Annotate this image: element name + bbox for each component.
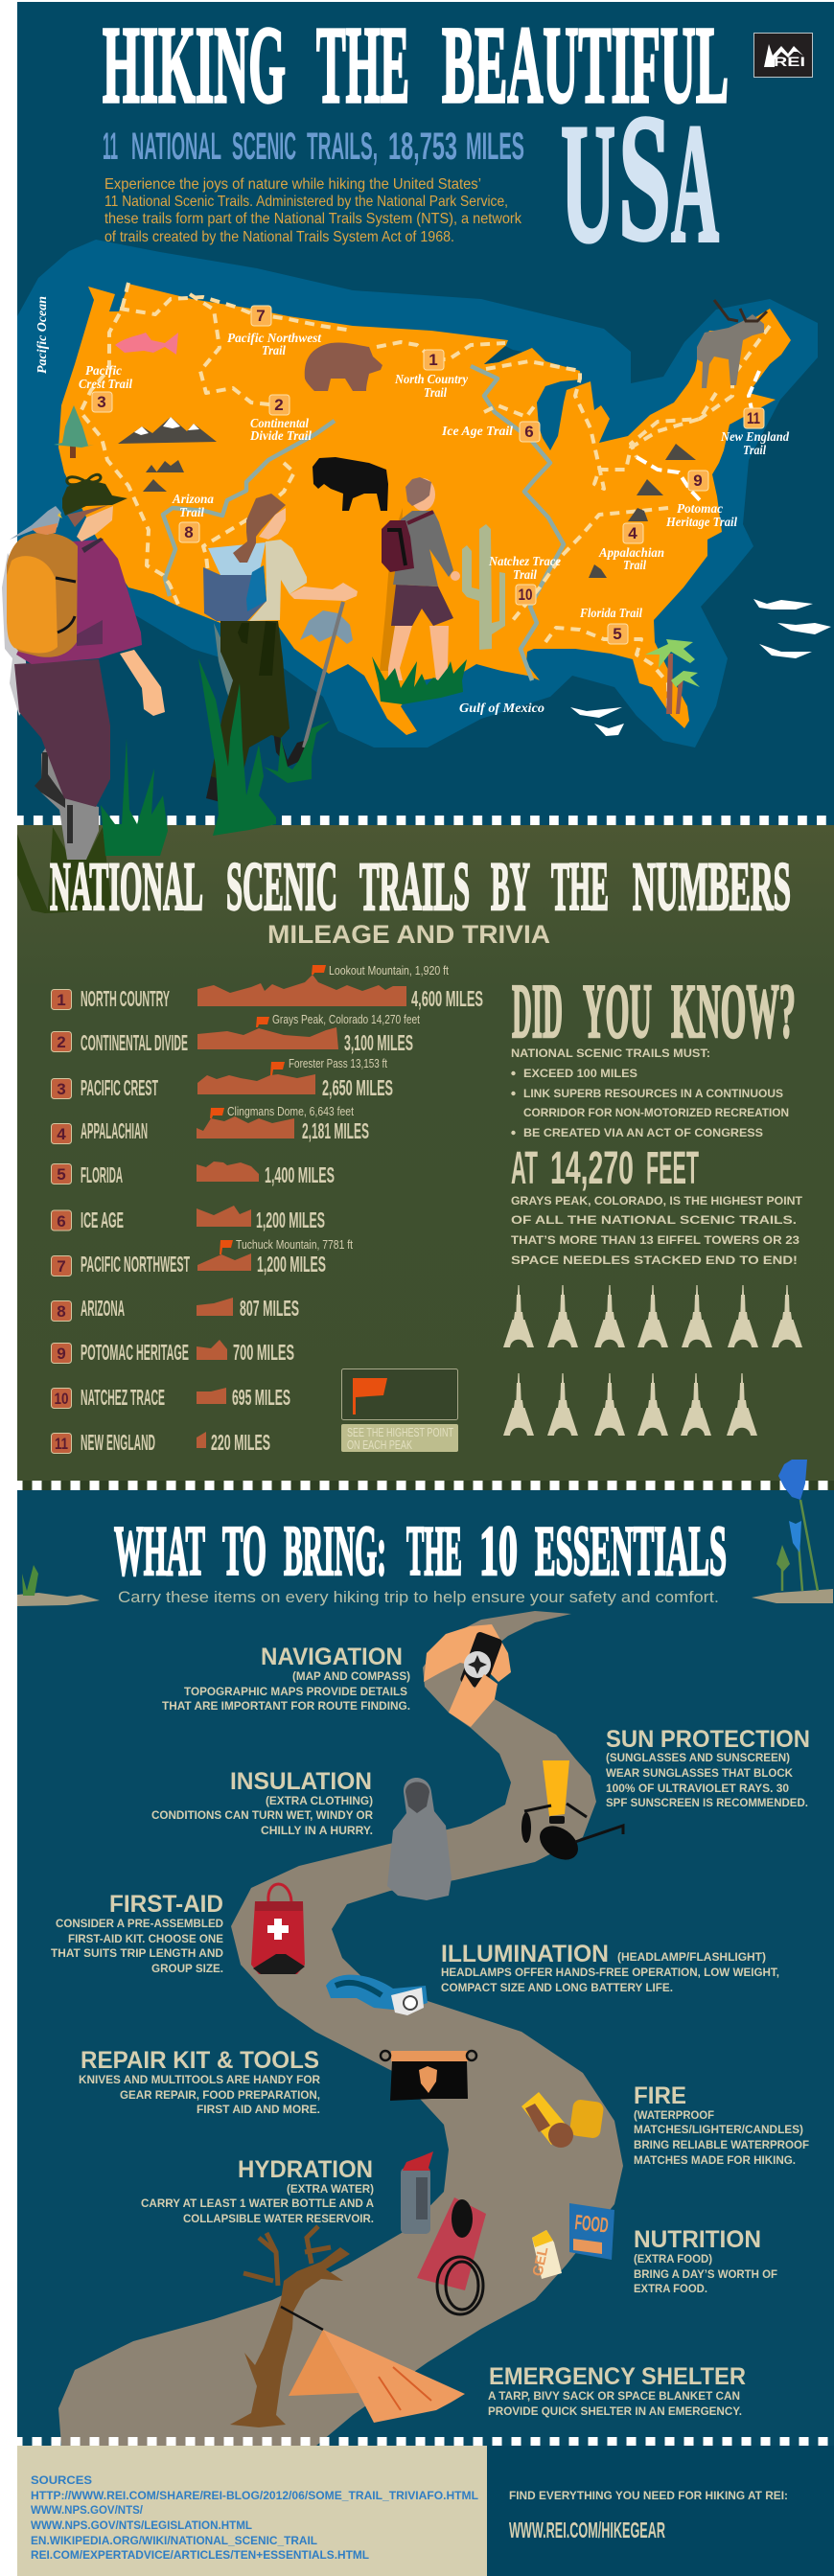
text: sun protection: WEAR SUNGLASSES THAT BLOCK	[606, 1766, 793, 1780]
row 4: 2,181 MILES	[302, 1118, 369, 1143]
stripe divider: numbers	[17, 1481, 834, 1490]
text: insulation: (EXTRA CLOTHING)	[266, 1794, 373, 1807]
text: navigation	[162, 1644, 410, 1713]
row 11: NEW ENGLAND	[81, 1430, 155, 1455]
row 7: 1,200 MILES	[257, 1252, 326, 1276]
row 8	[52, 1296, 299, 1321]
heading: sources: SOURCES	[31, 2473, 92, 2487]
legend: highest point flag	[341, 1368, 458, 1452]
map: USA landmass	[58, 284, 791, 735]
heading: numbers: SCENIC	[226, 848, 337, 925]
heading: did you know	[512, 970, 796, 1054]
icon: moose	[697, 300, 767, 388]
row 8: 8	[57, 1302, 66, 1321]
icon: small peaks	[143, 444, 696, 578]
grass clump: hiker 2 right	[264, 721, 331, 783]
icon: headlamp	[326, 1975, 428, 2015]
stripe divider: essentials	[17, 2437, 834, 2446]
text: fire: (WATERPROOF	[634, 2108, 714, 2122]
row 1: Lookout Mountain, 1,920 ft	[329, 963, 449, 978]
heading: what to bring: WHAT	[114, 1512, 205, 1591]
text: navigation: NAVIGATION	[261, 1644, 403, 1670]
intro paragraph: 11 National Scenic Trails. Administered by the National Park Service,	[104, 194, 508, 210]
row 6: ICE AGE	[81, 1208, 124, 1232]
text: hydration: CARRY AT LEAST 1 WATER BOTTLE AND A	[141, 2196, 374, 2210]
row 3	[52, 1056, 393, 1100]
list: source links: WWW.NPS.GOV/NTS/LEGISLATION.HTML	[31, 2518, 252, 2532]
text: hydration	[141, 2156, 374, 2225]
text: repair kit: GEAR REPAIR, FOOD PREPARATION,	[120, 2088, 320, 2102]
text: first-aid: FIRST-AID KIT. CHOOSE ONE	[68, 1932, 223, 1945]
map labels: Trail	[513, 568, 537, 583]
icon: first-aid bag	[251, 1884, 305, 1974]
icon: gel and food packets: GEL	[529, 2245, 551, 2278]
text: emergency shelter: A TARP, BIVY SACK OR SPACE BLANKET CAN	[488, 2389, 740, 2403]
text: sun protection: 100% OF ULTRAVIOLET RAYS. 30	[606, 1782, 789, 1795]
decor: left mound and plant	[17, 1565, 100, 1606]
row 1: 1	[57, 991, 66, 1009]
hiker 3	[372, 477, 467, 704]
trail badges: 5	[613, 625, 622, 643]
row 3: 2,650 MILES	[322, 1075, 393, 1100]
panel: map hero	[17, 2, 834, 825]
trail badges: 10	[518, 586, 533, 604]
trails: highlighted white routes	[637, 371, 759, 501]
icon: rain jacket	[387, 1778, 452, 1900]
panel: numbers section: FEET	[646, 1143, 699, 1194]
hikers and foreground	[2, 474, 467, 913]
text: insulation: INSULATION	[230, 1768, 372, 1795]
text: illumination	[441, 1941, 779, 1994]
map labels: Continental	[250, 417, 309, 431]
heading: did you know: DID	[512, 970, 563, 1054]
text: navigation: THAT ARE IMPORTANT FOR ROUTE FINDING.	[162, 1699, 410, 1713]
trail badges: 8	[184, 523, 194, 541]
text: hydration: (EXTRA WATER)	[287, 2182, 374, 2196]
text: illumination: (HEADLAMP/FLASHLIGHT)	[617, 1950, 766, 1964]
text: insulation: CONDITIONS CAN TURN WET, WINDY OR	[151, 1808, 373, 1822]
panel: call to action footer: FIND EVERYTHING YOU NEED FOR HIKING AT REI:	[509, 2489, 788, 2502]
lake superior	[484, 346, 522, 364]
row 1: 4,600 MILES	[411, 986, 483, 1011]
text: illumination: COMPACT SIZE AND LONG BATTERY LIFE.	[441, 1981, 673, 1994]
heading: numbers: TRAILS	[359, 848, 470, 925]
row 2: Grays Peak, Colorado 14,270 feet	[272, 1012, 420, 1026]
row 11: 220 MILES	[211, 1430, 270, 1455]
panel: call to action footer: WWW.REI.COM/HIKEGEAR	[509, 2518, 665, 2542]
row 4	[52, 1104, 369, 1144]
title: USA: S	[618, 78, 671, 279]
text: illumination: HEADLAMPS OFFER HANDS-FREE OPERATION, LOW WEIGHT,	[441, 1966, 779, 1979]
callout: 14,270 feet: AT	[511, 1143, 538, 1194]
map halo	[17, 240, 818, 748]
text: fire: MATCHES/LIGHTER/CANDLES)	[634, 2123, 803, 2136]
intro paragraph: these trails form part of the National Trails System (NTS), a network	[104, 211, 522, 227]
heading: what to bring	[114, 1512, 727, 1591]
text: navigation: TOPOGRAPHIC MAPS PROVIDE DETAILS	[184, 1685, 407, 1698]
heading: numbers: BY	[491, 848, 530, 925]
decor: right mound and flowers	[752, 1460, 833, 1603]
row 5	[52, 1162, 335, 1187]
heading: what to bring: THE	[406, 1512, 462, 1591]
map labels: Natchez Trace	[488, 555, 561, 569]
list: source links	[31, 2489, 478, 2562]
text: fire	[634, 2082, 809, 2167]
row 5: 5	[57, 1165, 66, 1184]
trails: dashed routes	[81, 283, 770, 706]
text: highest point trivia: THAT’S MORE THAN 13 EIFFEL TOWERS OR 23	[511, 1233, 799, 1247]
stripe divider: hero	[17, 816, 834, 825]
row 6: 1,200 MILES	[256, 1208, 325, 1232]
text: first-aid: CONSIDER A PRE-ASSEMBLED	[56, 1917, 223, 1930]
text: repair kit: FIRST AID AND MORE.	[197, 2103, 320, 2116]
heading: numbers: NATIONAL	[50, 848, 203, 925]
row 4: APPALACHIAN	[81, 1118, 148, 1143]
logo: REI	[753, 33, 813, 77]
subtitle: NATIONAL	[131, 126, 221, 168]
row 1: NORTH COUNTRY	[81, 986, 170, 1011]
icon: bare tree	[230, 2226, 350, 2427]
panel: sources footer	[17, 2446, 487, 2576]
list: source links: REI.COM/EXPERTADVICE/ARTICLES/TEN+ESSENTIALS.HTML	[31, 2548, 369, 2562]
row 5: FLORIDA	[81, 1162, 123, 1187]
row 8: ARIZONA	[81, 1296, 125, 1321]
dark grass	[17, 827, 112, 913]
chart: trail mileage rows	[52, 963, 483, 1455]
icon: water bottle	[401, 2151, 433, 2234]
icon: sunscreen and sunglasses	[521, 1760, 623, 1867]
list: source links: WWW.NPS.GOV/NTS/	[31, 2503, 144, 2517]
map labels: Pacific Northwest	[227, 332, 322, 346]
list: trail requirements	[511, 1046, 789, 1139]
hiker 1	[2, 474, 165, 860]
map labels: Trail	[424, 386, 447, 401]
winding trail road	[58, 1611, 623, 2446]
text: illumination: ILLUMINATION	[441, 1941, 609, 1967]
row 10: NATCHEZ TRACE	[81, 1385, 165, 1410]
map labels: New England	[720, 430, 790, 445]
subtitle: SCENIC	[232, 126, 296, 168]
row 7: Tuchuck Mountain, 7781 ft	[236, 1237, 353, 1252]
text: highest point trivia: GRAYS PEAK, COLORADO, IS THE HIGHEST POINT	[511, 1194, 803, 1208]
text: navigation: (MAP AND COMPASS)	[292, 1669, 410, 1683]
icon: repair kit pouch	[381, 2051, 476, 2101]
row 4: Clingmans Dome, 6,643 feet	[227, 1104, 354, 1118]
row 9: 9	[57, 1345, 66, 1363]
list: trail requirements: CORRIDOR FOR NON-MOTORIZED RECREATION	[523, 1106, 789, 1119]
icon: navigation hand and compass	[424, 1624, 511, 1727]
panel: numbers background	[17, 825, 834, 1490]
trail badges: 1	[429, 351, 438, 369]
text: nutrition: EXTRA FOOD.	[634, 2282, 707, 2295]
panel: call to action footer	[487, 2446, 834, 2576]
row 7: 7	[57, 1257, 66, 1276]
icon: bison	[313, 457, 388, 511]
intro paragraph: Experience the joys of nature while hiking the United States’	[104, 176, 481, 193]
title: USA: U	[561, 88, 615, 278]
subtitle	[103, 126, 524, 168]
icons: eiffel towers	[503, 1285, 802, 1436]
text: first-aid: GROUP SIZE.	[151, 1962, 223, 1975]
map labels: Pacific	[85, 364, 123, 379]
title: HIKING	[103, 4, 286, 126]
heading: what to bring: BRING:	[284, 1512, 386, 1591]
text: insulation	[151, 1768, 373, 1837]
text: sun protection: SUN PROTECTION	[606, 1726, 810, 1753]
text: first-aid: FIRST-AID	[109, 1891, 223, 1918]
text: nutrition: (EXTRA FOOD)	[634, 2252, 712, 2266]
icon: water reservoir	[417, 2197, 486, 2314]
text: sun protection: SPF SUNSCREEN IS RECOMMENDED.	[606, 1796, 808, 1809]
text: sun protection: (SUNGLASSES AND SUNSCREEN)	[606, 1751, 790, 1764]
row 7	[52, 1237, 353, 1276]
text: fire: BRING RELIABLE WATERPROOF	[634, 2138, 809, 2151]
map labels: Gulf of Mexico	[459, 702, 544, 716]
trail badges: 7	[256, 307, 266, 325]
map labels: Crest Trail	[79, 378, 132, 392]
map labels: Potomac	[677, 502, 724, 517]
rivers	[163, 366, 564, 680]
subheading: Carry these items on every hiking trip to help ensure your safety and comfort.	[118, 1588, 719, 1606]
text: fire: MATCHES MADE FOR HIKING.	[634, 2153, 796, 2167]
map labels	[35, 296, 790, 716]
row 2: CONTINENTAL DIVIDE	[81, 1030, 188, 1055]
icon: palm trees	[645, 639, 700, 714]
list: trail requirements: NATIONAL SCENIC TRAILS MUST:	[511, 1046, 710, 1060]
map labels: Trail	[623, 559, 646, 573]
map labels: Trail	[179, 506, 204, 520]
trail badges: 3	[97, 393, 106, 411]
panel: map hero: MILES	[466, 126, 524, 168]
list: source links: EN.WIKIPEDIA.ORG/WIKI/NATIONAL_SCENIC_TRAIL	[31, 2534, 317, 2547]
panel: map hero: A	[671, 88, 719, 278]
panel: numbers section	[50, 848, 803, 1455]
row 11: 11	[55, 1435, 68, 1453]
heading: did you know: YOU	[583, 970, 652, 1054]
row 3: PACIFIC CREST	[81, 1075, 158, 1100]
logo: REI: REI	[774, 54, 805, 69]
text: emergency shelter: PROVIDE QUICK SHELTER IN AN EMERGENCY.	[488, 2404, 742, 2418]
heading: numbers	[50, 848, 791, 925]
map labels: Trail	[743, 444, 766, 458]
icon: salmon	[115, 333, 178, 355]
text: repair kit	[79, 2047, 320, 2116]
text: highest point trivia	[511, 1194, 803, 1267]
legend: highest point flag: SEE THE HIGHEST POINT	[347, 1425, 453, 1439]
subheading: MILEAGE AND TRIVIA	[267, 920, 550, 949]
text: sun protection	[606, 1726, 810, 1809]
map labels: Appalachian	[598, 546, 664, 561]
map labels: North Country	[394, 373, 469, 387]
row 7: PACIFIC NORTHWEST	[81, 1252, 190, 1276]
row 4: 4	[57, 1125, 66, 1143]
callout: 14,270 feet: 14,270	[550, 1143, 634, 1194]
icon: bird on pack	[10, 506, 62, 540]
intro paragraph	[104, 176, 522, 245]
text: repair kit: REPAIR KIT & TOOLS	[81, 2047, 319, 2074]
map labels: Trail	[262, 344, 286, 358]
text: first-aid	[51, 1891, 223, 1975]
hiker 2	[198, 494, 358, 836]
row 9: 700 MILES	[233, 1340, 294, 1365]
row 9: POTOMAC HERITAGE	[81, 1340, 189, 1365]
icon: emergency tarp	[281, 2307, 465, 2423]
map labels: Pacific Ocean	[35, 296, 50, 374]
row 2	[52, 1012, 420, 1055]
trail badges: 11	[747, 409, 760, 427]
intro paragraph: of trails created by the National Trails System Act of 1968.	[104, 229, 454, 245]
heading: what to bring: 10	[479, 1512, 518, 1591]
icon: gel and food packets: FOOD	[573, 2210, 610, 2238]
trail badges: 6	[524, 423, 534, 441]
icon: waterproof matches	[521, 2092, 604, 2148]
row 1	[52, 963, 483, 1011]
icon: armadillo	[300, 610, 353, 644]
subtitle: TRAILS,	[307, 126, 378, 168]
trail badges: 4	[628, 524, 637, 542]
text: highest point trivia: SPACE NEEDLES STACKED END TO END!	[511, 1254, 798, 1267]
row 10: 10	[54, 1390, 69, 1408]
row 2: 3,100 MILES	[344, 1030, 413, 1055]
text: first-aid: THAT SUITS TRIP LENGTH AND	[51, 1946, 223, 1960]
map labels: Florida Trail	[579, 607, 642, 621]
subtitle: 18,753	[388, 126, 457, 168]
text: nutrition: NUTRITION	[634, 2226, 761, 2253]
row 2: 2	[57, 1033, 66, 1051]
map labels: Divide Trail	[249, 429, 312, 444]
row 3: 3	[57, 1080, 66, 1098]
list: trail requirements: EXCEED 100 MILES	[523, 1067, 637, 1080]
title	[103, 4, 729, 126]
icon: gel and food packets	[529, 2203, 614, 2279]
list: source links: HTTP://WWW.REI.COM/SHARE/REI-BLOG/2012/06/SOME_TRAIL_TRIVIAFO.HTML	[31, 2489, 478, 2502]
text: hydration: COLLAPSIBLE WATER RESERVOIR.	[183, 2212, 374, 2225]
text: nutrition: BRING A DAY’S WORTH OF	[634, 2267, 777, 2281]
row 6: 6	[57, 1212, 66, 1230]
trail badges	[92, 306, 764, 644]
grass clump: hiker 2	[198, 658, 276, 836]
list: trail requirements: BE CREATED VIA AN ACT OF CONGRESS	[523, 1126, 763, 1139]
subtitle: 11	[103, 126, 118, 168]
icon: cactus	[462, 524, 505, 650]
text: fire: FIRE	[634, 2082, 686, 2109]
icon: snowy mountains	[118, 417, 217, 444]
grass clump: hiker 1	[101, 738, 168, 856]
row 3: Forester Pass 13,153 ft	[289, 1056, 387, 1070]
text: emergency shelter: EMERGENCY SHELTER	[489, 2363, 746, 2390]
heading: numbers: THE	[551, 848, 609, 925]
text: emergency shelter	[488, 2363, 746, 2418]
legend: highest point flag: ON EACH PEAK	[347, 1438, 412, 1452]
list: trail requirements: LINK SUPERB RESOURCES IN A CONTINUOUS	[523, 1087, 783, 1100]
map labels: Ice Age Trail	[441, 425, 513, 439]
panel: essentials section	[17, 1460, 834, 2446]
text: repair kit: KNIVES AND MULTITOOLS ARE HANDY FOR	[79, 2073, 320, 2086]
map labels: Heritage Trail	[665, 516, 737, 530]
grass clump: hiker 3	[372, 656, 467, 704]
icon: bear	[305, 342, 382, 391]
text: nutrition	[634, 2226, 777, 2295]
trail badges: 9	[693, 472, 703, 490]
row 8: 807 MILES	[240, 1296, 299, 1321]
heading: what to bring: TO	[222, 1512, 266, 1591]
text: insulation: CHILLY IN A HURRY.	[261, 1824, 373, 1837]
title: THE	[316, 4, 409, 126]
row 5: 1,400 MILES	[265, 1162, 335, 1187]
text: hydration: HYDRATION	[238, 2156, 373, 2183]
map labels: Arizona	[172, 493, 214, 507]
icon: sea birds	[570, 599, 831, 736]
row 6	[52, 1206, 325, 1232]
trail badges: 2	[274, 396, 284, 414]
row 10: 695 MILES	[232, 1385, 290, 1410]
text: highest point trivia: OF ALL THE NATIONAL SCENIC TRAILS.	[511, 1213, 797, 1227]
icon: pine tree	[54, 405, 94, 458]
